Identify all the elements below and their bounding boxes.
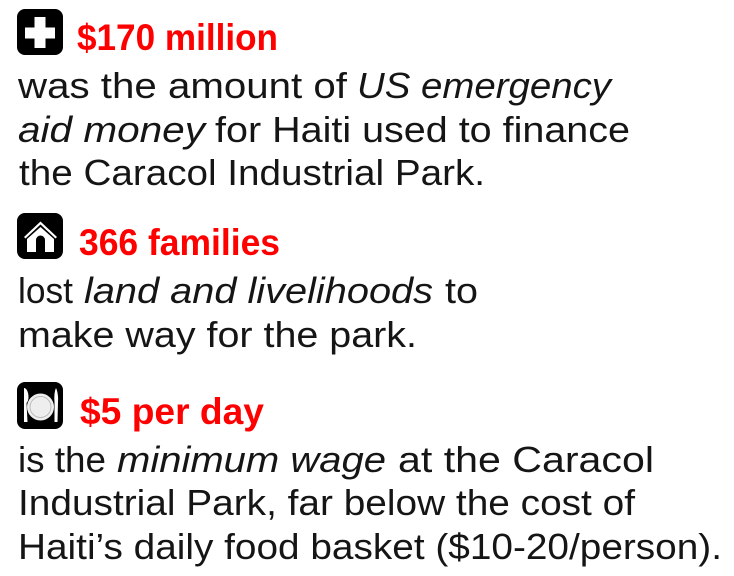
- text block: aid description: for Haiti used to finance: [215, 109, 630, 150]
- text block: aid description: aid money: [18, 109, 207, 150]
- icon: house: [17, 213, 63, 259]
- text block: wage description: at the Caracol: [398, 439, 654, 480]
- panel: US emergency aid: [17, 9, 630, 193]
- text block: aid description: US emergency: [357, 65, 613, 106]
- text block: families description: land and livelihoods: [84, 270, 433, 311]
- heading: $5 per day: $5 per day: [80, 391, 264, 432]
- text block: families description: make way for the park.: [18, 314, 417, 355]
- text block: families description: lost: [18, 270, 73, 311]
- text block: wage description: minimum wage: [117, 439, 386, 480]
- text block: wage description: Haiti’s daily food basket ($10-20/person).: [18, 526, 722, 567]
- text block: families description: to: [445, 270, 478, 311]
- text block: families description: [18, 270, 478, 355]
- heading: $170 million: $170 million: [77, 17, 278, 58]
- panel: displaced families: [17, 213, 478, 355]
- icon: plate and cutlery: [17, 382, 63, 429]
- icon: medical cross: [17, 9, 63, 55]
- text block: wage description: is the: [18, 439, 106, 480]
- heading: 366 families: 366 families: [79, 222, 280, 263]
- text block: wage description: [18, 439, 722, 567]
- text block: aid description: [17, 65, 630, 193]
- text block: aid description: was the amount of: [17, 65, 348, 106]
- text block: wage description: Industrial Park, far below the cost of: [18, 482, 636, 523]
- panel: minimum wage: [17, 382, 722, 567]
- text block: aid description: the Caracol Industrial Park.: [19, 152, 485, 193]
